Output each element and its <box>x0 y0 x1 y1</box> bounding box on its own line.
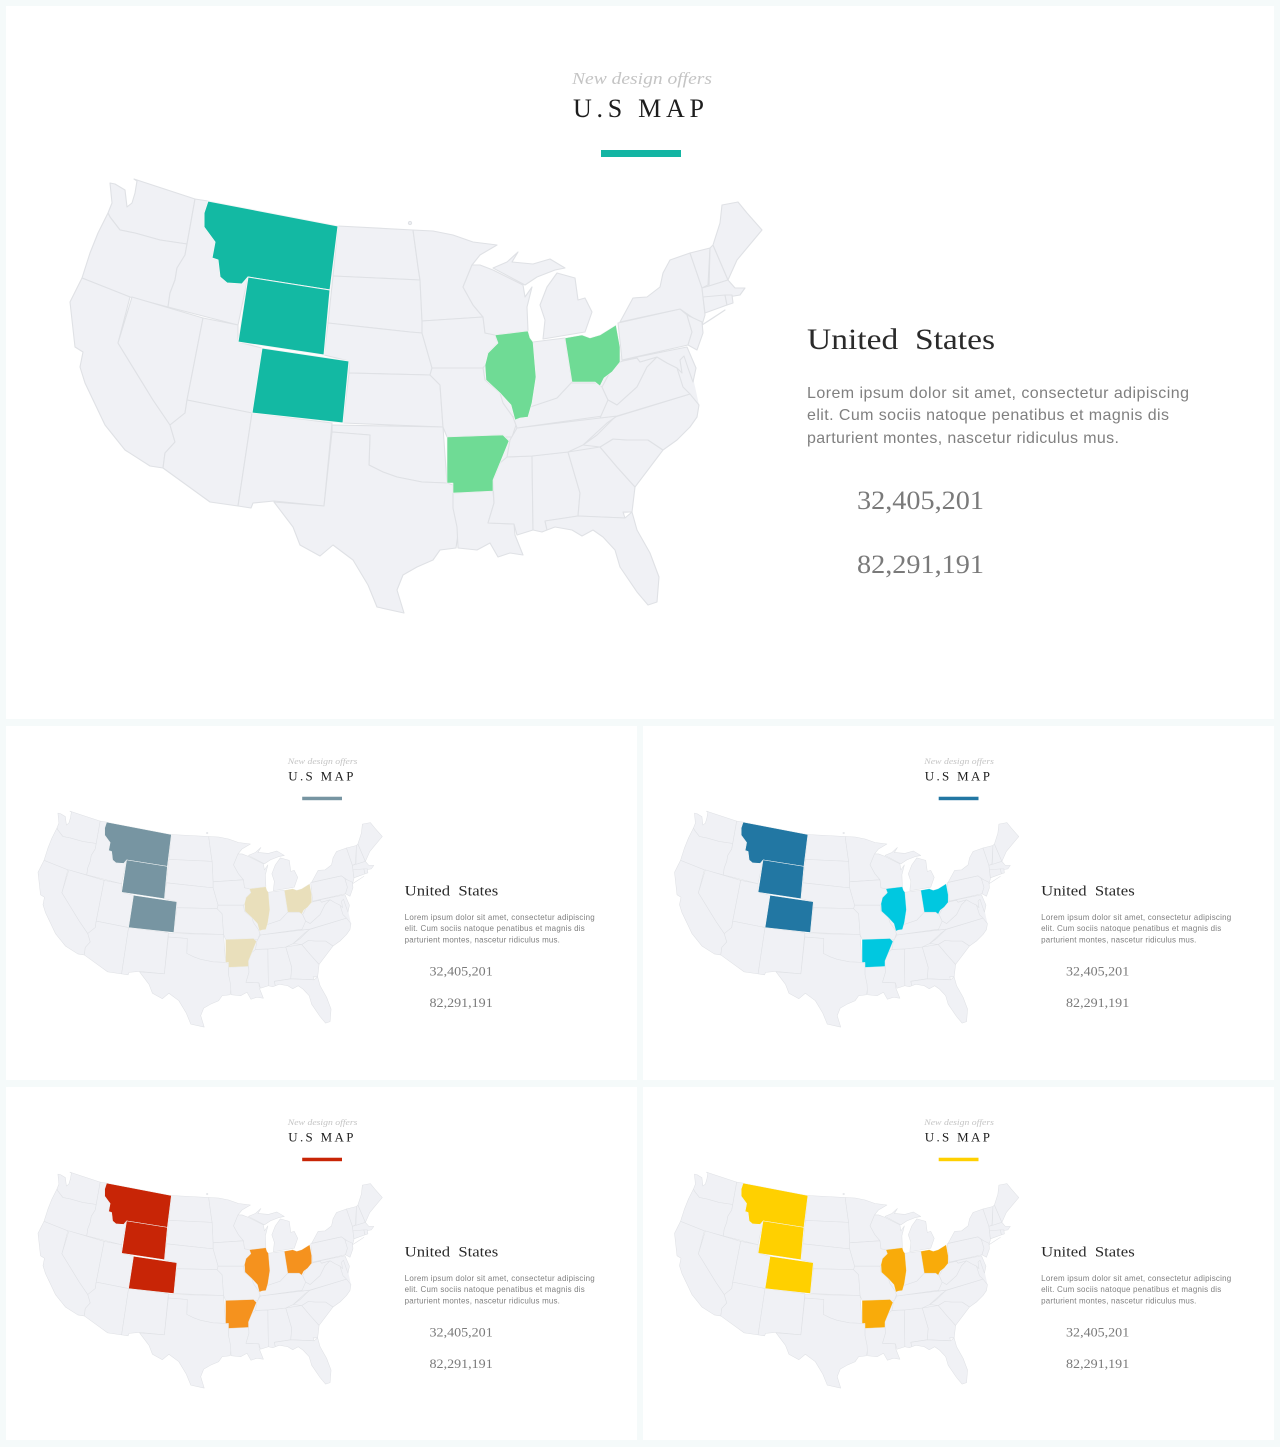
description: elit. Cum sociis natoque penatibus et magnis dis <box>807 407 1169 424</box>
US map <box>675 811 1019 1027</box>
description: elit. Cum sociis natoque penatibus et magnis dis <box>405 1285 585 1294</box>
accent bar <box>939 1158 978 1161</box>
US map <box>70 179 762 613</box>
description: Lorem ipsum dolor sit amet, consectetur adipiscing <box>807 385 1189 402</box>
state: Illinois <box>485 331 536 420</box>
panel: yellow and amber slide <box>643 1087 1274 1440</box>
stat: 82,291,191 <box>430 1356 493 1371</box>
accent bar <box>601 150 681 157</box>
title: U.S MAP <box>288 768 353 783</box>
state: Arkansas <box>447 435 509 493</box>
description: elit. Cum sociis natoque penatibus et magnis dis <box>405 924 585 933</box>
title: U.S MAP <box>925 768 990 783</box>
state: Wyoming <box>238 277 330 355</box>
panel: blue and cyan slide <box>643 726 1274 1080</box>
stat: 32,405,201 <box>430 963 493 978</box>
stat: 82,291,191 <box>430 995 493 1010</box>
subtitle: New design offers <box>287 1117 358 1127</box>
subtitle: New design offers <box>923 756 995 766</box>
subtitle: New design offers <box>923 1117 995 1127</box>
US map <box>38 811 382 1027</box>
accent bar <box>302 797 342 800</box>
panel: red and orange slide <box>6 1087 637 1440</box>
description: Lorem ipsum dolor sit amet, consectetur adipiscing <box>405 913 595 922</box>
stat: 32,405,201 <box>1066 1324 1129 1339</box>
description: parturient montes, nascetur ridiculus mus. <box>405 935 560 944</box>
panel: slate and sand slide <box>6 726 637 1080</box>
description <box>1041 1274 1231 1305</box>
description: elit. Cum sociis natoque penatibus et magnis dis <box>1041 924 1221 933</box>
description <box>405 913 595 944</box>
description: parturient montes, nascetur ridiculus mus. <box>807 430 1119 447</box>
stat: 32,405,201 <box>857 486 984 515</box>
title: U.S MAP <box>573 94 704 123</box>
description: parturient montes, nascetur ridiculus mus. <box>405 1296 560 1305</box>
heading: United States <box>807 323 995 356</box>
description: parturient montes, nascetur ridiculus mus. <box>1041 1296 1196 1305</box>
heading: United States <box>1041 884 1135 900</box>
stat: 82,291,191 <box>1066 995 1129 1010</box>
stat: 32,405,201 <box>1066 963 1129 978</box>
subtitle: New design offers <box>571 69 712 88</box>
stat: 82,291,191 <box>1066 1356 1129 1371</box>
US map <box>675 1172 1019 1388</box>
description: elit. Cum sociis natoque penatibus et magnis dis <box>1041 1285 1221 1294</box>
stat: 32,405,201 <box>430 1324 493 1339</box>
description <box>405 1274 595 1305</box>
state: Colorado <box>252 348 349 423</box>
description: Lorem ipsum dolor sit amet, consectetur adipiscing <box>405 1274 595 1283</box>
panel: large teal map slide <box>6 6 1274 719</box>
heading: United States <box>405 1245 498 1261</box>
description <box>1041 913 1231 944</box>
description: Lorem ipsum dolor sit amet, consectetur adipiscing <box>1041 913 1231 922</box>
subtitle: New design offers <box>287 756 358 766</box>
state: Montana <box>204 201 338 290</box>
title: U.S MAP <box>925 1129 990 1144</box>
description <box>807 385 1189 447</box>
state: Ohio <box>565 325 620 386</box>
title: U.S MAP <box>288 1129 353 1144</box>
heading: United States <box>405 884 498 900</box>
heading: United States <box>1041 1245 1135 1261</box>
description: parturient montes, nascetur ridiculus mus. <box>1041 935 1196 944</box>
accent bar <box>302 1158 342 1161</box>
description: Lorem ipsum dolor sit amet, consectetur adipiscing <box>1041 1274 1231 1283</box>
US map <box>38 1172 382 1388</box>
accent bar <box>939 797 978 800</box>
stat: 82,291,191 <box>857 550 984 579</box>
